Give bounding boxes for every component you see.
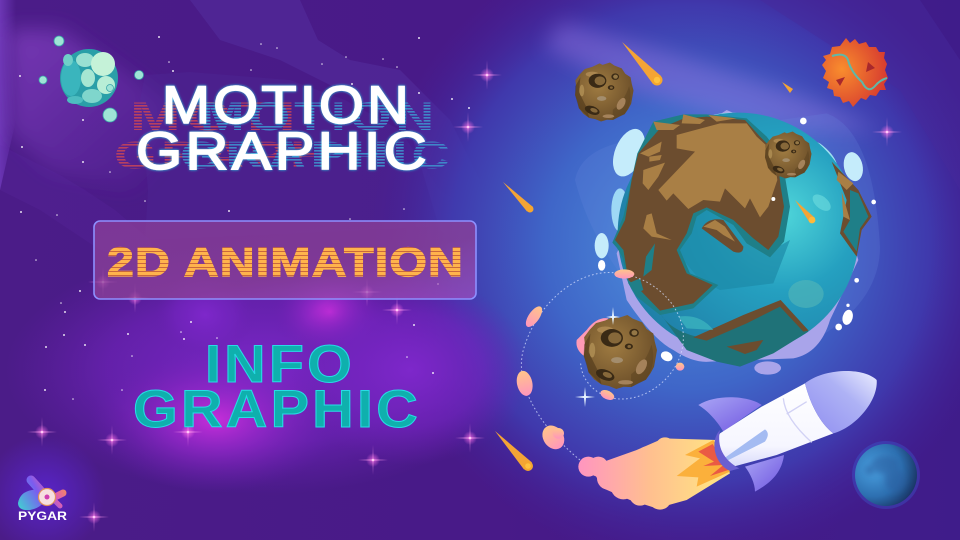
orbit path [521, 273, 683, 460]
rocket seam [783, 398, 812, 442]
heading: info graphic: GRAPHIC [133, 380, 421, 439]
white sparkles [575, 307, 620, 407]
logo: PYGAR: PYGAR [18, 511, 68, 523]
panel: 2D animation [94, 221, 476, 299]
heading: info graphic: INFO [205, 335, 355, 394]
icon: blue planet [852, 441, 920, 509]
logo: PYGAR [18, 480, 68, 523]
heading: info graphic [133, 335, 421, 439]
title: motion graphic ghost: MOTION [200, 95, 438, 139]
title: motion graphic [136, 76, 430, 181]
rocket side pod [722, 429, 768, 461]
exhaust trail [578, 437, 730, 510]
rocket nozzle [714, 430, 739, 471]
rocket fin: lower [745, 455, 784, 492]
rocket body [717, 383, 833, 467]
asteroid: top [575, 62, 634, 122]
starfield [19, 36, 470, 400]
title: motion graphic ghost: GRAPHIC [180, 135, 454, 177]
title: motion graphic: GRAPHIC [136, 122, 430, 181]
illustration: rocket and trail [515, 269, 877, 510]
sparkles [27, 60, 902, 532]
rocket fin: upper [698, 397, 762, 432]
rocket nose [805, 371, 877, 433]
title: motion graphic: MOTION [162, 76, 412, 135]
meteors [495, 42, 793, 471]
label: 2D animation: 2D ANIMATION [107, 239, 464, 285]
asteroid: on planet [765, 132, 812, 178]
meteor on planet [795, 200, 815, 223]
illustration: main planet [575, 110, 880, 375]
asteroid: big [584, 315, 657, 389]
icon: teal cell planet [39, 36, 144, 122]
title: motion graphic ghost [114, 95, 454, 177]
icon: red planet [822, 38, 888, 107]
title: motion graphic ghost: GRAPH [114, 135, 334, 177]
title: motion graphic ghost: MOTI [130, 95, 300, 139]
